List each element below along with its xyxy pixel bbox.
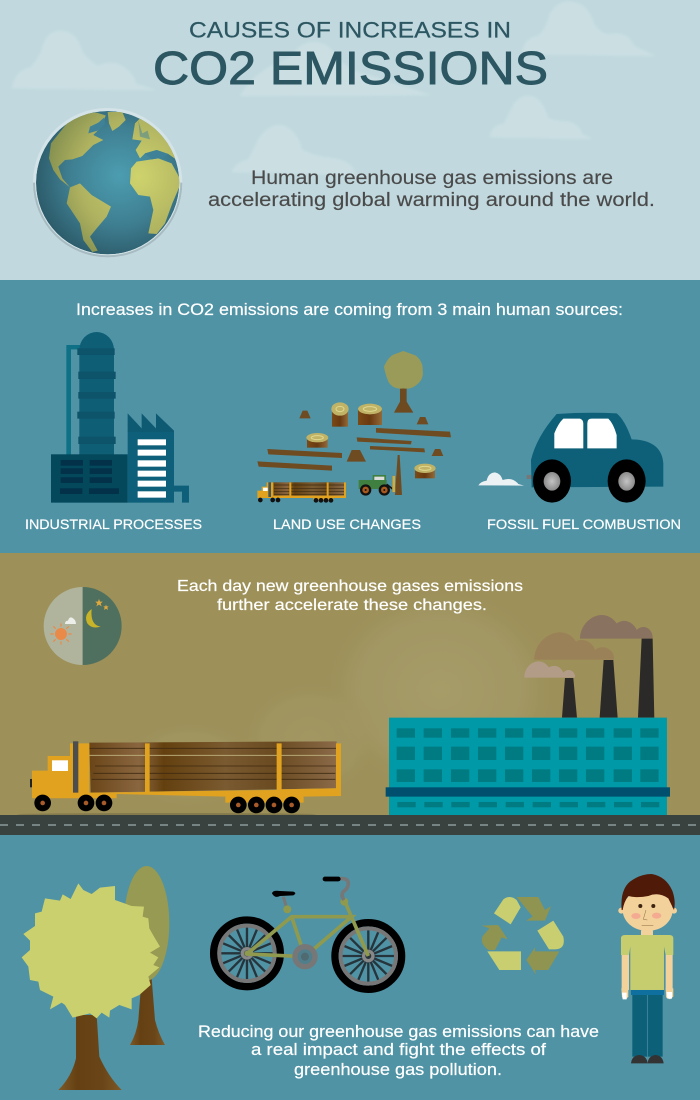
text: each day: Each day new greenhouse gases emissions: [177, 578, 523, 595]
clouds in the sky: [12, 2, 655, 175]
icon: car with exhaust: [478, 413, 663, 503]
text: reducing emissions: [198, 1023, 599, 1079]
text: each day: [177, 578, 523, 614]
panel: three human sources: [0, 280, 700, 553]
heading: main sources: Increases in CO2 emissions are coming from 3 main human sources:: [76, 301, 623, 319]
standing tree: [384, 351, 423, 413]
text: intro: accelerating global warming around the world.: [208, 190, 655, 211]
title: CO2 EMISSIONS: [153, 42, 548, 94]
text: reducing emissions: a real impact and fight the effects of: [251, 1041, 546, 1059]
icon: recycle symbol: [482, 897, 564, 975]
logging truck: [17, 741, 341, 816]
road: [0, 815, 700, 835]
factory with smokestacks: [386, 615, 670, 815]
icon: person: [618, 874, 677, 1063]
panel: daily emissions scene: [0, 553, 700, 835]
icon: industrial plant: [51, 332, 189, 503]
hazy smoke background: [120, 585, 560, 810]
icon: globe: [33, 108, 182, 257]
stumps: [306, 402, 436, 478]
green tractor: [359, 475, 395, 496]
text: intro: [208, 168, 655, 211]
icon: day and night dial: [44, 587, 122, 665]
panel: reducing emissions: [0, 835, 700, 1100]
panel: sky header: [14, 3, 654, 258]
icon: trees: [22, 866, 169, 1090]
icon: bicycle: [214, 877, 402, 989]
label: land use changes: LAND USE CHANGES: [273, 517, 421, 532]
cut logs and small stumps: [257, 411, 451, 495]
text: reducing emissions: Reducing our greenhouse gas emissions can have: [198, 1023, 599, 1041]
label: industrial processes: INDUSTRIAL PROCESSES: [25, 517, 202, 532]
icon: land use changes: [257, 351, 451, 503]
title: [153, 18, 548, 94]
small logging truck: [257, 482, 346, 503]
text: each day: further accelerate these changes.: [217, 597, 487, 614]
text: intro: Human greenhouse gas emissions are: [251, 168, 613, 189]
title: CAUSES OF INCREASES IN: [189, 18, 511, 42]
label: fossil fuel combustion: FOSSIL FUEL COMBUSTION: [487, 517, 681, 532]
text: reducing emissions: greenhouse gas pollution.: [294, 1061, 502, 1079]
